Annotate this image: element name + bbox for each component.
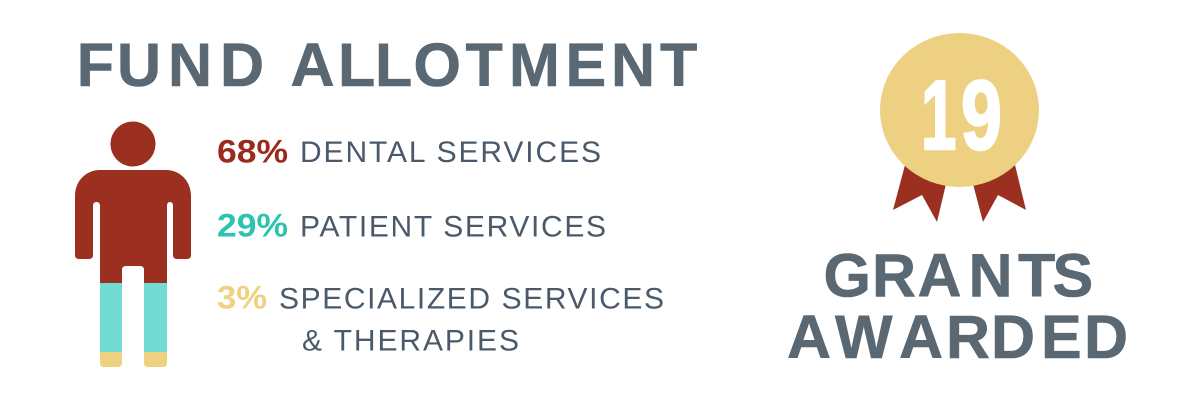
person head	[110, 122, 156, 166]
icon: medal with ribbons	[880, 33, 1039, 222]
medal number: 1	[921, 60, 956, 170]
list item: patient services: 29%	[217, 208, 288, 244]
list item: specialized services and therapies	[217, 280, 664, 358]
list item: specialized services and therapies: & THERAPIES	[302, 324, 519, 358]
list item: specialized services and therapies: SPECIALIZED SERVICES	[279, 282, 664, 316]
medal number: 9	[961, 62, 1002, 170]
medal number	[921, 60, 1002, 170]
medal disc	[880, 33, 1039, 187]
heading: grants awarded	[787, 242, 1128, 371]
list item: specialized services and therapies: 3%	[217, 280, 267, 316]
person upper body, 68 percent	[75, 170, 191, 283]
list item: dental services: 68%	[217, 134, 288, 170]
person legs, 29 percent	[100, 283, 167, 352]
person feet, 3 percent	[100, 352, 167, 367]
heading: grants awarded: AWARDED	[787, 303, 1128, 371]
heading: grants awarded: GRANTS	[824, 242, 1093, 310]
list item: dental services: DENTAL SERVICES	[300, 136, 601, 169]
list item: patient services: PATIENT SERVICES	[300, 210, 606, 244]
title: fund allotment: FUNDALLOTMENT	[77, 31, 697, 99]
medal ribbons	[893, 165, 1026, 222]
icon: person split by fund share	[75, 122, 191, 367]
